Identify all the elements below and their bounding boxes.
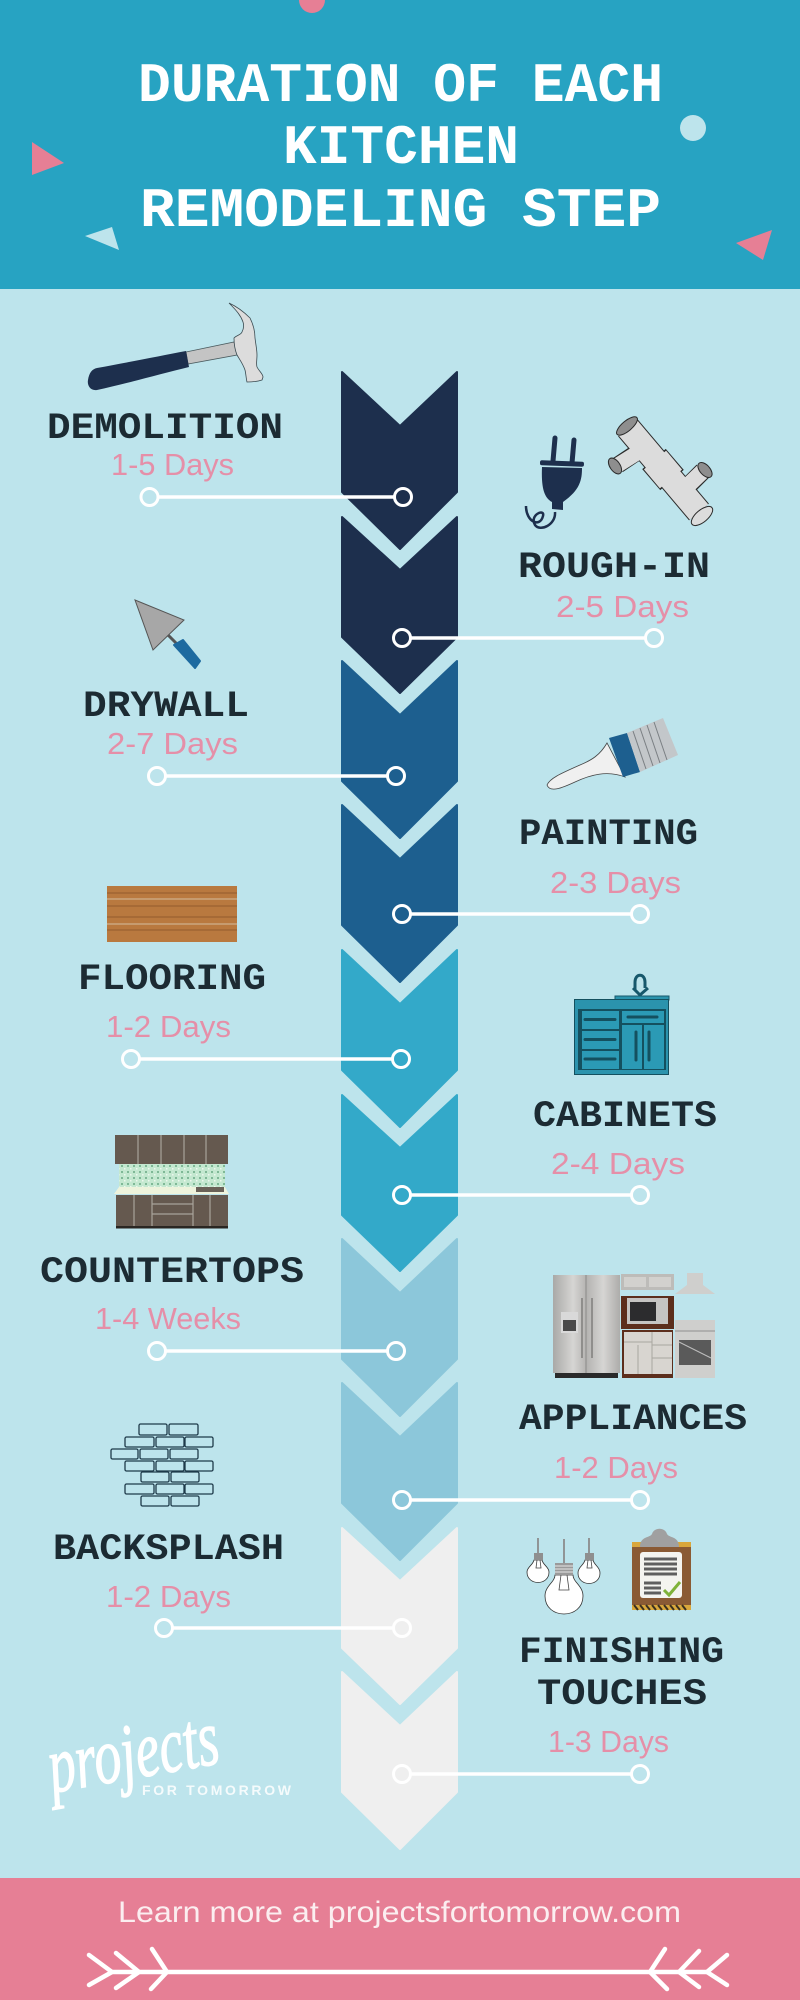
icon: pipe [606,414,716,529]
heading: COUNTERTOPS [40,1252,304,1294]
footer link text: Learn more at projectsfortomorrow.com [118,1896,681,1929]
step: finishing touches [394,1529,724,1782]
icon: wood floor [107,886,237,942]
heading: TOUCHES [537,1674,707,1716]
heading [519,1632,724,1716]
logo: projects [37,1694,225,1811]
heading: DRYWALL [83,686,249,728]
heading: APPLIANCES [519,1399,747,1441]
heading: FLOORING [78,959,266,1001]
connector [394,1186,648,1204]
step: painting [394,718,698,922]
heading: CABINETS [533,1096,717,1138]
step: flooring [78,886,410,1068]
heading: BACKSPLASH [53,1529,284,1571]
icon: hammer [88,303,263,390]
step: demolition [47,303,412,506]
duration: 1-5 Days [111,447,234,482]
panel: footer [0,1878,800,2000]
connector [141,488,412,506]
decoration: pink triangle left [32,142,64,175]
title: KITCHEN [283,116,519,180]
duration: 1-2 Days [106,1579,231,1614]
duration: 1-2 Days [554,1450,678,1485]
icon: paint brush [547,718,678,789]
title: DURATION OF EACH [138,54,663,118]
step: backsplash [53,1424,410,1636]
connector [148,768,404,784]
duration: 2-3 Days [550,865,681,900]
connector [148,1342,404,1360]
connector [394,1492,648,1508]
duration: 2-7 Days [107,726,238,761]
duration: 1-3 Days [548,1724,669,1759]
decoration: pink circle [299,0,325,13]
icon: light bulbs [527,1538,600,1614]
duration: 2-4 Days [551,1146,685,1181]
arrow [89,1949,727,1989]
icon: kitchen counter [114,1135,229,1228]
step: drywall [83,600,404,784]
step: cabinets [394,975,717,1204]
icon: kitchen appliances [553,1273,715,1378]
logo: FOR TOMORROW [142,1782,292,1798]
decoration: light circle [680,115,706,141]
icon: sink cabinet [574,975,669,1074]
heading: ROUGH-IN [518,547,710,589]
icon: trowel [135,600,200,668]
duration: 2-5 Days [556,589,689,624]
icon: clipboard checklist [632,1529,691,1610]
step: countertops [40,1135,404,1360]
panel: header [0,0,800,289]
heading: DEMOLITION [47,408,283,450]
step: rough-in [394,414,716,646]
decoration: pink triangle right [736,230,772,260]
title: REMODELING STEP [140,179,661,243]
duration: 1-4 Weeks [95,1301,241,1336]
connector [156,1620,410,1636]
duration: 1-2 Days [106,1009,231,1044]
connector [394,1766,648,1782]
connector [394,630,662,646]
heading: FINISHING [519,1632,724,1674]
chevron timeline [342,372,457,1849]
step: appliances [394,1273,747,1508]
heading: PAINTING [519,814,698,856]
connector [394,906,648,922]
decoration: light triangle [85,227,119,250]
connector [122,1050,410,1068]
title [138,54,663,243]
icon: plug [526,438,584,528]
icon: bricks [111,1424,213,1506]
